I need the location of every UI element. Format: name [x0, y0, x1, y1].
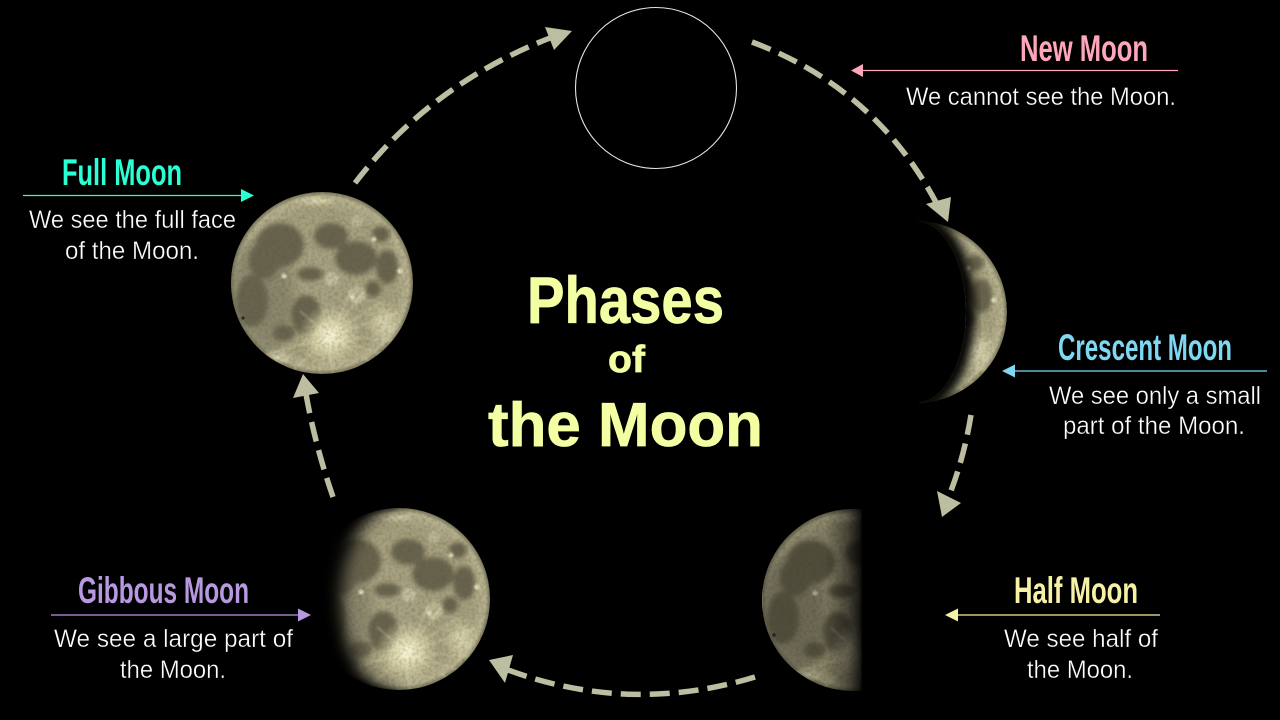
title — [488, 263, 763, 460]
label: gibbous moon: Gibbous Moon — [78, 570, 249, 611]
crescent moon — [917, 221, 1007, 403]
arrow: full to new moon — [355, 27, 572, 183]
label: new moon: New Moon — [1020, 28, 1148, 69]
label: full moon: We see the full face — [29, 206, 236, 234]
label: gibbous moon — [51, 570, 311, 684]
full moon — [226, 192, 413, 374]
label: full moon: Full Moon — [62, 152, 182, 193]
label: crescent moon: part of the Moon. — [1063, 412, 1245, 440]
title: the Moon — [488, 391, 763, 460]
label: gibbous moon: the Moon. — [120, 656, 226, 684]
gibbous moon — [180, 480, 490, 720]
title: of — [608, 339, 645, 381]
label: full moon: of the Moon. — [65, 237, 199, 265]
label: crescent moon: We see only a small — [1049, 382, 1261, 410]
label: new moon: We cannot see the Moon. — [906, 83, 1176, 111]
new moon outline — [576, 8, 736, 168]
title: Phases — [527, 263, 724, 337]
label: half moon: We see half of — [1004, 625, 1158, 653]
half moon — [757, 500, 952, 700]
label: gibbous moon: We see a large part of — [54, 625, 293, 653]
label: new moon — [851, 28, 1178, 111]
label: half moon — [945, 570, 1160, 684]
label: full moon — [23, 152, 254, 265]
arrow: half to gibbous — [489, 655, 755, 694]
arrow: gibbous to full — [293, 374, 333, 497]
label: crescent moon — [1002, 327, 1267, 440]
arrow: crescent to half — [937, 415, 971, 517]
label: half moon: the Moon. — [1027, 656, 1133, 684]
arrow: new moon to crescent — [752, 42, 951, 222]
label: half moon: Half Moon — [1014, 570, 1138, 611]
